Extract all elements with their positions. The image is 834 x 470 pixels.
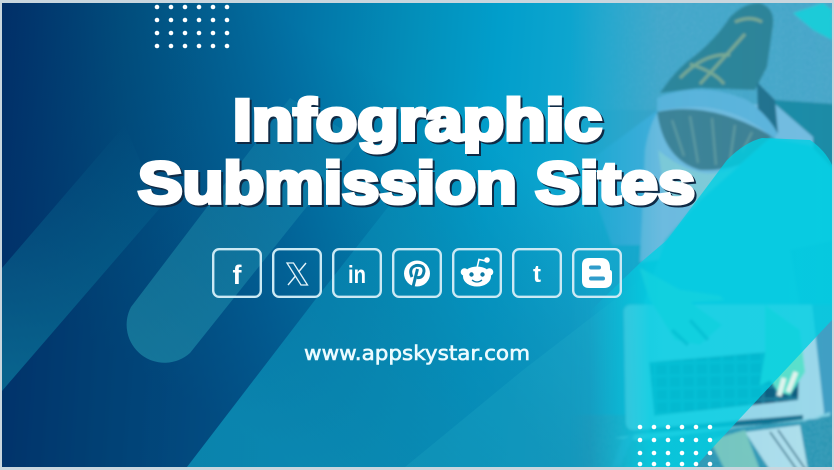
laptop right side fabric	[816, 320, 832, 416]
icon: tumblr	[513, 249, 561, 297]
hair strands	[680, 18, 762, 84]
title: Submission Sites	[140, 153, 697, 218]
teal fabric corner	[793, 3, 832, 40]
hair highlights	[672, 116, 752, 165]
laptop lid	[624, 305, 824, 430]
collar shadow	[757, 82, 778, 133]
lower left blanket tint	[623, 246, 642, 398]
icon: reddit	[453, 249, 501, 297]
sweater body	[660, 137, 830, 259]
hood	[640, 104, 813, 262]
icon: pinterest	[393, 249, 441, 297]
icon: X	[273, 249, 321, 297]
hinge strip	[654, 414, 804, 430]
icon: facebook: f	[232, 260, 242, 290]
icon: blogger	[573, 249, 621, 297]
icon: facebook	[213, 249, 261, 297]
headband	[657, 89, 778, 138]
lap pattern	[594, 415, 832, 467]
teal diagonal overlay band	[560, 138, 832, 467]
icon: linkedin	[333, 249, 381, 297]
sleeve shading	[790, 240, 834, 335]
social icon row	[213, 249, 621, 297]
website url: www.appskystar.com	[304, 341, 530, 365]
title: Submission Sites	[138, 151, 695, 216]
dot grid: bottom	[638, 425, 712, 466]
hood shadow left	[596, 112, 657, 246]
neck	[659, 152, 716, 206]
diagonal background shapes	[2, 108, 613, 467]
blanket	[586, 3, 832, 166]
fingers shadow	[672, 320, 708, 345]
keyboard	[649, 350, 800, 416]
stand	[626, 435, 633, 440]
left hand	[640, 268, 724, 345]
laptop base	[614, 412, 830, 440]
title	[138, 88, 697, 218]
head hair	[657, 109, 775, 170]
title: Infographic	[233, 88, 602, 153]
icon: linkedin: in	[348, 261, 366, 289]
title: Infographic	[235, 90, 604, 155]
hair bun	[660, 3, 773, 93]
dot grid: top	[155, 5, 229, 48]
right hand fingers	[779, 372, 796, 396]
right hand	[760, 305, 805, 395]
icon: tumblr: t	[533, 261, 541, 288]
background photo: person using a laptop	[586, 3, 832, 467]
